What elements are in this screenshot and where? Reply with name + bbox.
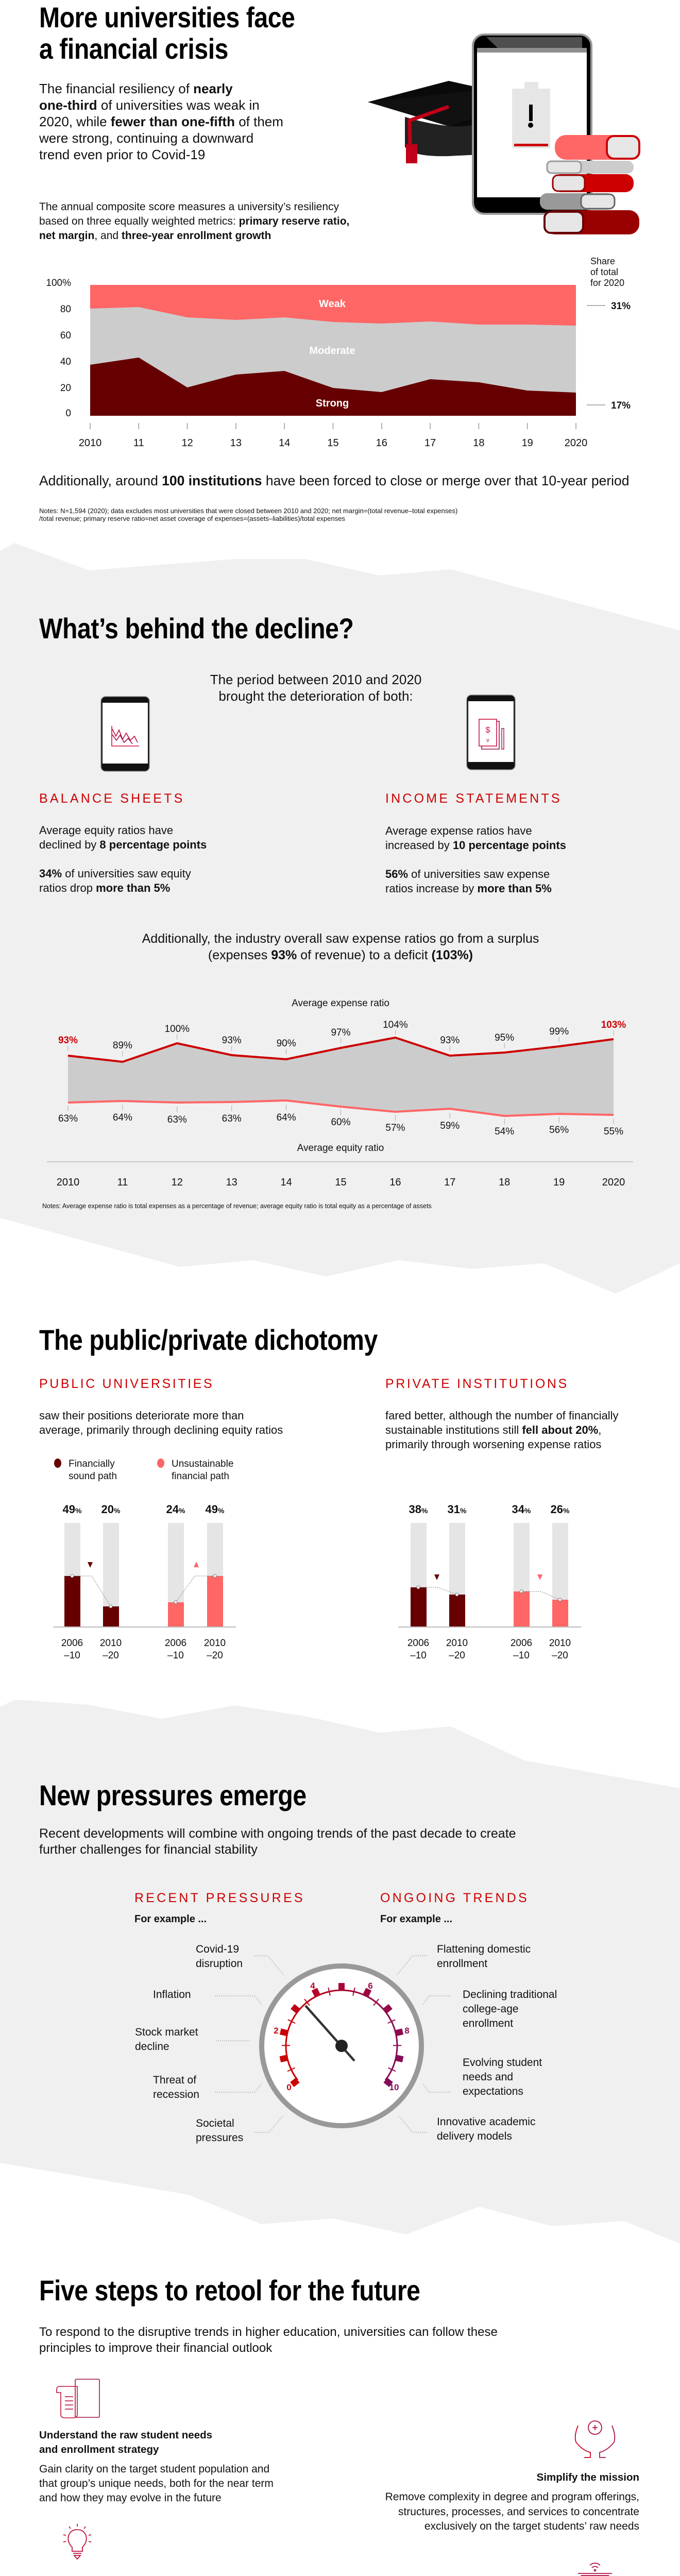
label: societal pressures: pressures [196, 2132, 243, 2144]
bar charts: public and private: 34% [512, 1503, 531, 1516]
notes: Notes: N=1,594 (2020); data excludes most universities that were closed between 2010 and 2020; net margin=(total revenue–total expenses) [39, 507, 457, 515]
step 2: simplify the mission: exclusively on the target students’ raw needs [424, 2520, 639, 2532]
intro text: were strong, continuing a downward [39, 130, 253, 146]
stacked area chart: resiliency shares: for 2020 [590, 278, 624, 288]
step 2: simplify the mission: Remove complexity in degree and program offerings, [385, 2491, 639, 2503]
bar charts: public and private: 2006 [407, 1638, 429, 1649]
stacked area chart: resiliency shares: 0 [65, 408, 71, 419]
stacked area chart: resiliency shares: 18 [473, 437, 485, 449]
for example right: For example ... [380, 1913, 452, 1925]
stacked area chart: resiliency shares: Strong [316, 398, 349, 409]
legend: Unsustainable [172, 1459, 233, 1469]
line chart: expense vs equity ratio: 57% [385, 1123, 405, 1133]
line chart: expense vs equity ratio: 59% [440, 1121, 460, 1131]
label: declining traditional enrollment [463, 1989, 557, 2029]
label: declining traditional enrollment: college-age [463, 2003, 519, 2015]
stacked area chart: resiliency shares: of total [590, 267, 618, 277]
label: societal pressures [196, 2117, 243, 2144]
metric description: based on three equally weighted metrics: primary reserve ratio, [39, 215, 349, 227]
line chart: expense vs equity ratio: 60% [331, 1117, 351, 1128]
step 2: simplify the mission [385, 2471, 639, 2532]
pressures intro: Recent developments will combine with ongoing trends of the past decade to create [39, 1826, 516, 1841]
heading: income statements: INCOME STATEMENTS [385, 791, 562, 806]
legend: Financially [69, 1459, 115, 1469]
line chart: expense vs equity ratio: 93% [222, 1035, 242, 1046]
gauge with leader lines: 8 [404, 2026, 410, 2036]
step 1: understand needs: Gain clarity on the target student population and [39, 2463, 269, 2475]
private text: fared better, although the number of financially [385, 1409, 619, 1422]
cap [368, 81, 479, 163]
for example left: For example ... [134, 1913, 207, 1925]
label: threat of recession: recession [153, 2089, 199, 2100]
private text: sustainable institutions still fell about 20%, [385, 1423, 601, 1436]
label: stock market decline [135, 2026, 198, 2053]
books [540, 135, 639, 234]
label: stock market decline: decline [135, 2041, 169, 2053]
step 1: understand needs: Understand the raw student needs [39, 2429, 212, 2441]
bar charts: public and private: 26% [551, 1503, 570, 1516]
bar charts: public and private: 2010 [446, 1638, 468, 1649]
gauge with leader lines: 10 [389, 2082, 399, 2092]
income statements text: ratios increase by more than 5% [385, 882, 552, 895]
title: More universities face [39, 1, 295, 33]
icon: phone with expense document: $ [486, 726, 490, 735]
line chart: expense vs equity ratio: 14 [280, 1177, 292, 1188]
balance sheets text [39, 824, 207, 894]
icon: light bulb [63, 2524, 92, 2560]
gauge with leader lines: 4 [310, 1981, 315, 1991]
heading: recent pressures: RECENT PRESSURES [134, 1891, 305, 1905]
bar charts: public and private: 2006 [165, 1638, 186, 1649]
bar charts: public and private: –10 [64, 1650, 80, 1661]
label: declining traditional enrollment: Declining traditional [463, 1989, 557, 2001]
label: threat of recession [153, 2074, 199, 2100]
public text [39, 1409, 283, 1436]
line chart: expense vs equity ratio: Notes: Average expense ratio is total expenses as a percentage of revenue; average equity ratio is total equity as a percentage of assets [42, 1202, 432, 1210]
heading: private institutions: PRIVATE INSTITUTIONS [385, 1377, 569, 1391]
line chart: expense vs equity ratio: 100% [164, 1024, 190, 1035]
line chart: expense vs equity ratio: 64% [277, 1112, 296, 1123]
bar charts: public and private: 49% [206, 1503, 225, 1516]
bar charts: public and private: –10 [410, 1650, 427, 1661]
heading: new pressures emerge: New pressures emerge [39, 1779, 307, 1811]
title: a financial crisis [39, 32, 228, 65]
intro text: The financial resiliency of nearly [39, 81, 233, 96]
metric description: net margin, and three-year enrollment growth [39, 230, 271, 242]
label: innovative delivery models [437, 2116, 535, 2142]
metric description: The annual composite score measures a university’s resiliency [39, 201, 339, 213]
bar charts: public and private: 2006 [61, 1638, 83, 1649]
stacked area chart: resiliency shares: 2020 [565, 437, 587, 449]
label: societal pressures: Societal [196, 2117, 234, 2129]
step 2: simplify the mission: Simplify the mission [537, 2471, 639, 2483]
five steps intro [39, 2325, 498, 2355]
stacked area chart: resiliency shares: 16 [376, 437, 387, 449]
pressures intro: further challenges for financial stability [39, 1842, 258, 1857]
stacked area chart: resiliency shares: Moderate [310, 345, 355, 357]
closures statement: Additionally, around 100 institutions have been forced to close or merge over that 10-year period [39, 473, 630, 488]
intro text [39, 81, 283, 162]
balance sheets text: declined by 8 percentage points 34% of universities saw equity [39, 838, 207, 880]
label: inflation: Inflation [153, 1989, 191, 2001]
pressures intro [39, 1826, 516, 1857]
stacked area chart: resiliency shares: 12 [181, 437, 193, 449]
line chart: expense vs equity ratio: 93% [440, 1035, 460, 1046]
gauge with leader lines: 6 [368, 1981, 373, 1991]
phone [473, 35, 591, 214]
bar charts: public and private: 20% [101, 1503, 121, 1516]
stacked area chart: resiliency shares [46, 256, 631, 449]
bar charts: public and private: 2006 [511, 1638, 532, 1649]
stacked area chart: resiliency shares: 15 [327, 437, 339, 449]
balance sheets text: Average equity ratios have [39, 824, 173, 837]
gauge with leader lines: 0 [286, 2082, 292, 2092]
private text: primarily through worsening expense ratios [385, 1438, 601, 1451]
line chart: expense vs equity ratio: 63% [222, 1113, 242, 1124]
illustration: phone, cap, books [368, 33, 640, 234]
bar charts: public and private: 24% [166, 1503, 185, 1516]
bar charts: public and private: –20 [103, 1650, 119, 1661]
bar charts: public and private: –20 [552, 1650, 568, 1661]
stacked area chart: resiliency shares: 80 [60, 304, 71, 315]
line chart: expense vs equity ratio: 13 [226, 1177, 237, 1188]
bar charts: public and private [53, 1503, 581, 1661]
income statements text [385, 824, 566, 895]
bar charts: public and private: 2010 [549, 1638, 571, 1649]
stacked area chart: resiliency shares: 11 [133, 437, 144, 449]
stacked area chart: resiliency shares: 19 [522, 437, 533, 449]
label: evolving student needs: expectations [463, 2086, 523, 2097]
step 1: understand needs: and how they may evolve in the future [39, 2492, 222, 2504]
stacked area chart: resiliency shares: 17% [611, 400, 631, 411]
public text: saw their positions deteriorate more than [39, 1409, 244, 1422]
label: covid-19 disruption: disruption [196, 1958, 243, 1970]
private text [385, 1409, 619, 1451]
line chart: expense vs equity ratio: 95% [495, 1032, 514, 1043]
line chart: expense vs equity ratio: 17 [444, 1177, 455, 1188]
stacked area chart: resiliency shares: 20 [60, 383, 71, 394]
expense ratio intro [142, 931, 539, 962]
line chart: expense vs equity ratio: Average expense ratio [292, 998, 389, 1009]
line chart: expense vs equity ratio: 55% [604, 1126, 623, 1137]
bar charts: public and private: 2010 [100, 1638, 122, 1649]
line chart: expense vs equity ratio: 97% [331, 1027, 351, 1038]
period intro text [210, 672, 421, 704]
expense ratio intro: Additionally, the industry overall saw expense ratios go from a surplus [142, 931, 539, 946]
icon: hands [575, 2420, 615, 2458]
balance sheets text: ratios drop more than 5% [39, 882, 170, 894]
legend [54, 1459, 233, 1482]
heading: ongoing trends: ONGOING TRENDS [380, 1891, 529, 1905]
line chart: expense vs equity ratio: 56% [549, 1125, 569, 1136]
icon: scroll [56, 2379, 100, 2418]
public text: average, primarily through declining equity ratios [39, 1423, 283, 1436]
icon: phone with declining chart [100, 696, 150, 772]
icon: phone with expense document [466, 694, 516, 770]
notes: /total revenue; primary reserve ratio=net asset coverage of expenses=(assets–liabilities)/total expenses [39, 515, 345, 522]
icon: tablet in hands [578, 2563, 612, 2576]
bar charts: public and private: –20 [449, 1650, 465, 1661]
label: evolving student needs: Evolving student [463, 2057, 542, 2069]
step 1: understand needs: and enrollment strategy [39, 2444, 159, 2455]
label: threat of recession: Threat of [153, 2074, 196, 2086]
intro text: trend even prior to Covid-19 [39, 147, 205, 162]
bar charts: public and private: –20 [207, 1650, 223, 1661]
gauge with leader lines: 2 [274, 2026, 279, 2036]
bar charts: public and private: 38% [409, 1503, 428, 1516]
bar charts: public and private: –10 [513, 1650, 530, 1661]
stacked area chart: resiliency shares: 40 [60, 357, 71, 367]
stacked area chart: resiliency shares: 60 [60, 330, 71, 341]
line chart: expense vs equity ratio: 16 [389, 1177, 401, 1188]
line chart: expense vs equity ratio: 11 [117, 1177, 128, 1188]
stacked area chart: resiliency shares: 13 [230, 437, 242, 449]
bar charts: public and private: 2010 [204, 1638, 226, 1649]
line chart: expense vs equity ratio: 18 [499, 1177, 510, 1188]
title [39, 1, 295, 65]
line chart: expense vs equity ratio: 54% [495, 1126, 514, 1137]
label: innovative delivery models: delivery models [437, 2130, 512, 2142]
income statements text: increased by 10 percentage points 56% of universities saw expense [385, 839, 566, 880]
intro text: one-third of universities was weak in [39, 97, 260, 113]
label: evolving student needs: needs and [463, 2071, 513, 2083]
line chart: expense vs equity ratio: 93% [58, 1035, 78, 1046]
line chart: expense vs equity ratio: 15 [335, 1177, 347, 1188]
label: innovative delivery models: Innovative academic [437, 2116, 535, 2128]
bar charts: public and private: 49% [63, 1503, 82, 1516]
gauge with leader lines [215, 1956, 451, 2133]
line chart: expense vs equity ratio: 103% [601, 1020, 626, 1030]
stacked area chart: resiliency shares: 14 [279, 437, 290, 449]
label: flattening domestic enrollment: enrollment [437, 1958, 487, 1970]
expense ratio intro: (expenses 93% of revenue) to a deficit (103%) [208, 948, 473, 962]
heading: what's behind the decline: What’s behind the decline? [39, 612, 353, 645]
line chart: expense vs equity ratio: 89% [113, 1040, 132, 1051]
stacked area chart: resiliency shares: 31% [611, 301, 631, 312]
heading: five steps: Five steps to retool for the future [39, 2274, 420, 2307]
heading: public/private dichotomy: The public/private dichotomy [39, 1324, 378, 1356]
metric description [39, 201, 349, 242]
notes [39, 507, 457, 522]
bar charts: public and private: 31% [448, 1503, 467, 1516]
line chart: expense vs equity ratio: 63% [167, 1114, 187, 1125]
line chart: expense vs equity ratio: 104% [383, 1020, 408, 1030]
stacked area chart: resiliency shares: Share [590, 256, 615, 266]
step 1: understand needs: that group’s unique needs, both for the near term [39, 2478, 274, 2489]
five steps intro: principles to improve their financial outlook [39, 2341, 272, 2355]
step 1: understand needs [39, 2429, 274, 2504]
label: covid-19 disruption [196, 1943, 243, 1970]
line chart: expense vs equity ratio: 64% [113, 1112, 132, 1123]
period intro text: brought the deterioration of both: [218, 688, 413, 704]
label: declining traditional enrollment: enrollment [463, 2018, 513, 2029]
label: covid-19 disruption: Covid-19 [196, 1943, 239, 1955]
line chart: expense vs equity ratio: Average equity ratio [297, 1143, 384, 1154]
icon: phone with expense document: v [486, 737, 489, 743]
intro text: 2020, while fewer than one-fifth of them [39, 114, 283, 129]
stacked area chart: resiliency shares: 2010 [79, 437, 101, 449]
step 2: simplify the mission: structures, processes, and services to concentrate [398, 2506, 639, 2517]
line chart: expense vs equity ratio: 90% [277, 1038, 296, 1049]
label: flattening domestic enrollment: Flattening domestic [437, 1943, 531, 1955]
stacked area chart: resiliency shares: 100% [46, 278, 71, 289]
line chart: expense vs equity ratio: 12 [172, 1177, 183, 1188]
line chart: expense vs equity ratio: 2010 [57, 1177, 79, 1188]
income statements text: Average expense ratios have [385, 824, 532, 837]
period intro text: The period between 2010 and 2020 [210, 672, 421, 687]
line chart: expense vs equity ratio: 63% [58, 1113, 78, 1124]
legend: sound path [69, 1471, 117, 1482]
heading: balance sheets: BALANCE SHEETS [39, 791, 184, 806]
five steps intro: To respond to the disruptive trends in higher education, universities can follow these [39, 2325, 498, 2339]
stacked area chart: resiliency shares: Weak [319, 298, 346, 310]
heading: public universities: PUBLIC UNIVERSITIES [39, 1377, 214, 1391]
label: flattening domestic enrollment [437, 1943, 531, 1970]
label: evolving student needs [463, 2057, 542, 2097]
stacked area chart: resiliency shares: 17 [424, 437, 436, 449]
label: stock market decline: Stock market [135, 2026, 198, 2038]
bar charts: public and private: –10 [167, 1650, 184, 1661]
line chart: expense vs equity ratio: 99% [549, 1026, 569, 1037]
line chart: expense vs equity ratio: 2020 [602, 1177, 625, 1188]
line chart: expense vs equity ratio: 19 [553, 1177, 565, 1188]
line chart: expense vs equity ratio [42, 998, 633, 1210]
legend: financial path [172, 1471, 229, 1482]
